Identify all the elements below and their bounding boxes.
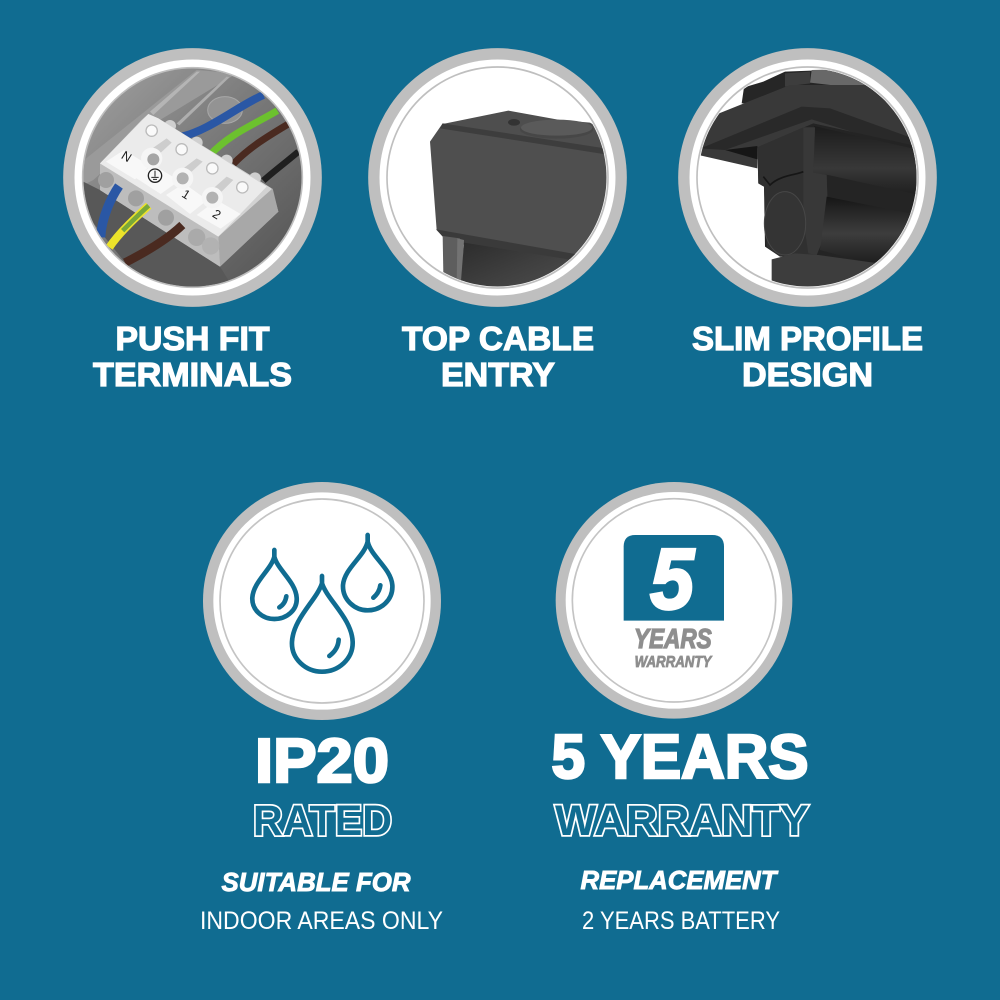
- panel: push fit terminals photo: N: [119, 148, 134, 165]
- heading: slim profile design: SLIM PROFILE: [692, 320, 923, 357]
- panel: push fit terminals photo: [63, 48, 322, 307]
- icon: 5 years warranty badge: YEARS: [634, 623, 712, 654]
- heading: push fit terminals: [93, 320, 292, 393]
- panel: push fit terminals photo: 1: [179, 187, 193, 202]
- wires in front: [101, 186, 119, 237]
- wires behind block: [182, 95, 263, 137]
- text block: 5 years warranty: 5 YEARS: [552, 723, 808, 792]
- heading: slim profile design: DESIGN: [742, 356, 873, 393]
- panel: top cable entry photo: [368, 48, 627, 307]
- text block: IP20 rated: SUITABLE FOR: [222, 867, 411, 897]
- text block: IP20 rated: INDOOR AREAS ONLY: [200, 907, 443, 935]
- heading: top cable entry: [402, 320, 594, 393]
- text block: 5 years warranty: [552, 723, 809, 935]
- text block: 5 years warranty: WARRANTY: [555, 797, 809, 845]
- heading: slim profile design: [692, 320, 923, 393]
- text block: 5 years warranty: 2 YEARS BATTERY: [582, 907, 780, 935]
- text block: IP20 rated: [200, 727, 443, 935]
- icon: 5 years warranty badge: 5: [650, 531, 695, 627]
- panel: push fit terminals photo: 2: [210, 207, 223, 222]
- icon: water drops badge: [203, 482, 441, 720]
- heading: push fit terminals: TERMINALS: [93, 356, 292, 393]
- heading: top cable entry: TOP CABLE: [402, 320, 594, 357]
- icon: 5 years warranty badge: WARRANTY: [635, 654, 713, 671]
- icon: 5 years warranty badge: [556, 482, 792, 719]
- text block: 5 years warranty: REPLACEMENT: [580, 865, 779, 895]
- heading: top cable entry: ENTRY: [441, 356, 555, 393]
- text block: IP20 rated: IP20: [255, 727, 389, 796]
- panel: slim profile design photo: [678, 48, 937, 307]
- text block: IP20 rated: RATED: [253, 797, 392, 845]
- heading: push fit terminals: PUSH FIT: [116, 320, 270, 357]
- terminal block: [165, 120, 176, 129]
